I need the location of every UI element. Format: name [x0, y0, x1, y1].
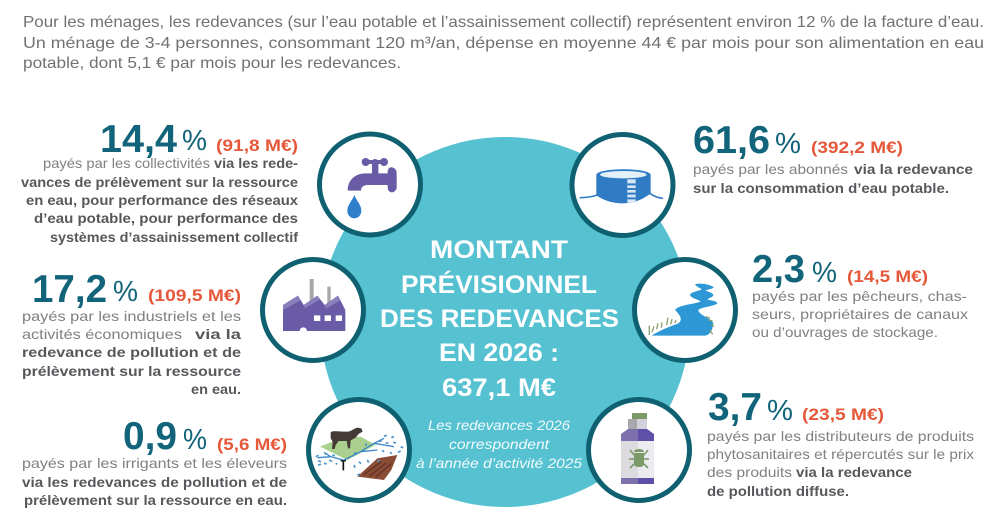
description: via les rede- [214, 155, 298, 171]
description [693, 161, 973, 196]
figure 2,3 % [752, 248, 928, 291]
description: payés par les distributeurs de produits [707, 428, 974, 444]
icon: pesticide bottle [588, 400, 690, 500]
description [707, 428, 974, 499]
description: payés par les abonnés [693, 161, 848, 177]
description: via la [195, 326, 241, 342]
figure 0,9 %: % [183, 424, 207, 456]
central heading: DES REDEVANCES [380, 305, 619, 333]
description: payés par les collectivités [43, 155, 210, 171]
figure 2,3 %: 2,3 [752, 248, 805, 291]
icon: river [634, 260, 736, 360]
figure 17,2 %: 17,2 [32, 268, 107, 311]
description: via la redevance [854, 161, 973, 177]
description: phytosanitaires et répercutés sur le prix [707, 446, 974, 462]
figure 14,4 %: % [182, 125, 207, 157]
description: d’eau potable, pour performance des [34, 210, 298, 226]
intro text [23, 14, 984, 72]
panel: distributeurs 3,7 % [707, 386, 974, 499]
description: en eau. [191, 381, 241, 397]
description: en eau, pour performance des réseaux [26, 192, 298, 208]
figure 14,4 %: 14,4 [100, 118, 177, 161]
figure 2,3 %: (14,5 M€) [847, 267, 928, 286]
figure 14,4 %: (91,8 M€) [216, 136, 298, 155]
figure 3,7 %: % [767, 395, 793, 427]
panel: abonnés 61,6 % [693, 119, 973, 196]
panel: irrigants 0,9 % [22, 415, 287, 508]
central heading: 637,1 M€ [442, 374, 556, 402]
figure 61,6 % [693, 119, 903, 162]
central heading: MONTANT [430, 236, 568, 264]
description [752, 288, 968, 340]
icon: water reservoir [572, 134, 673, 236]
figure 0,9 %: (5,6 M€) [217, 435, 287, 454]
intro text: potable, dont 5,1 € par mois pour les redevances. [23, 55, 401, 72]
description: prélèvement sur la ressource [22, 363, 241, 379]
description: via les redevances de pollution et de [22, 474, 287, 490]
figure 3,7 %: 3,7 [708, 386, 762, 429]
description: payés par les irrigants et les éleveurs [22, 455, 287, 471]
central heading: PRÉVISIONNEL [401, 270, 597, 299]
description: activités économiques [22, 326, 182, 342]
figure 0,9 %: 0,9 [123, 415, 177, 458]
central note: correspondent [449, 436, 550, 452]
description: ou d’ouvrages de stockage. [752, 324, 938, 340]
description: des produits [707, 464, 792, 480]
description: via la redevance [796, 464, 912, 480]
description [22, 455, 287, 508]
description: de pollution diffuse. [707, 483, 849, 499]
description: prélèvement sur la ressource en eau. [24, 492, 287, 508]
central note [416, 417, 582, 471]
figure 61,6 %: 61,6 [693, 119, 770, 162]
icon: water tap [320, 134, 420, 235]
intro text: Pour les ménages, les redevances (sur l’eau potable et l’assainissement collectif) représentent environ 12 % de la facture d’eau. [23, 14, 984, 31]
icon: farm with cow and irrigation [308, 400, 410, 500]
figure 61,6 %: % [775, 128, 801, 160]
figure 61,6 %: (392,2 M€) [811, 138, 903, 157]
figure 0,9 % [123, 415, 287, 458]
figure 3,7 % [708, 386, 884, 429]
central heading: EN 2026 : [439, 339, 559, 367]
figure 3,7 %: (23,5 M€) [802, 405, 884, 424]
central note: à l’année d’activité 2025 [416, 455, 582, 471]
panel: industriels 17,2 % [22, 268, 241, 397]
icon: factory [262, 260, 364, 360]
panel: pêcheurs 2,3 % [752, 248, 968, 340]
figure 17,2 %: % [113, 276, 138, 308]
figure 2,3 %: % [812, 257, 837, 289]
description: seurs, propriétaires de canaux [752, 306, 968, 322]
panel: collectivités 14,4 % [21, 118, 298, 245]
figure 14,4 % [100, 118, 298, 161]
description: redevance de pollution et de [22, 344, 241, 360]
description: sur la consommation d’eau potable. [693, 180, 949, 196]
intro text: Un ménage de 3-4 personnes, consommant 120 m³/an, dépense en moyenne 44 € par mois pour son alimentation en eau [23, 35, 984, 52]
description: vances de prélèvement sur la ressource [21, 174, 298, 190]
figure 17,2 % [32, 268, 241, 311]
central note: Les redevances 2026 [428, 417, 570, 433]
figure 17,2 %: (109,5 M€) [148, 286, 241, 305]
central heading [380, 236, 619, 402]
description: payés par les industriels et les [22, 308, 241, 324]
description: payés par les pêcheurs, chas- [752, 288, 967, 304]
description [22, 308, 241, 397]
description [21, 155, 298, 245]
description: systèmes d’assainissement collectif [50, 229, 298, 245]
central circle [320, 137, 690, 507]
